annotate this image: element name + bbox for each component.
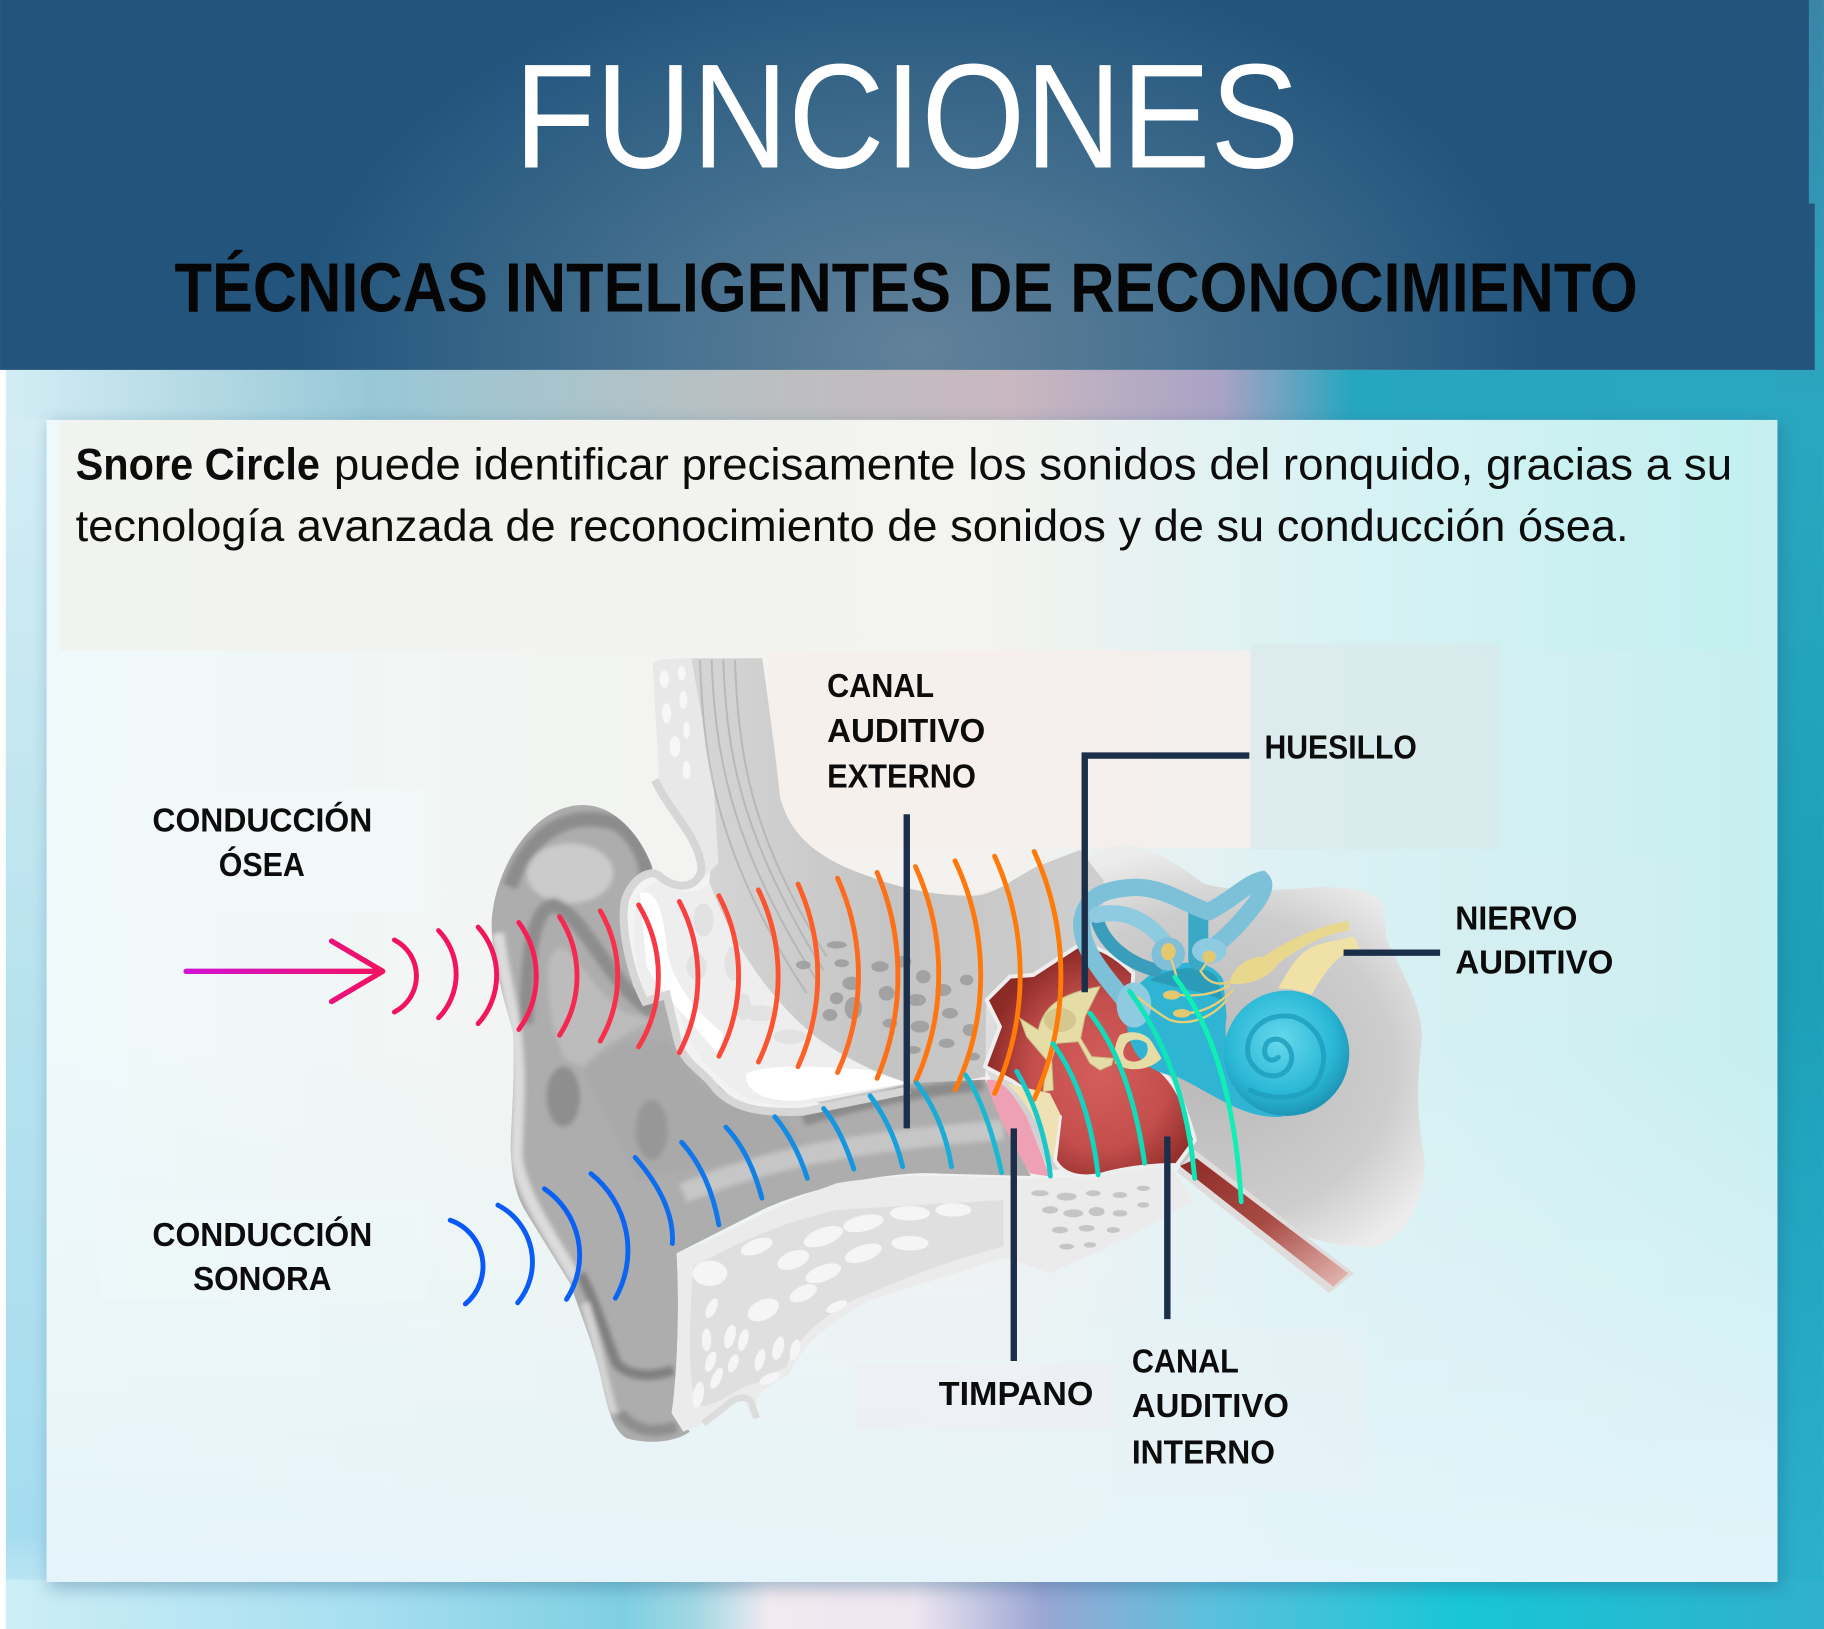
eardrum [987,1080,1050,1177]
label: canal auditivo interno [1132,1344,1289,1471]
label: canal auditivo interno: AUDITIVO [1132,1388,1289,1425]
lower bone [672,1164,1194,1432]
label: canal auditivo externo: CANAL [827,668,934,705]
outer ear bones and pinna [492,658,1194,1442]
label: nervio auditivo: AUDITIVO [1455,945,1613,982]
label: conducción sonora: SONORA [193,1261,332,1298]
cochlea [1224,991,1349,1116]
leader lines [907,756,1440,1361]
label: canal auditivo interno: CANAL [1132,1344,1239,1381]
intro text [76,440,1732,551]
semicircular canals [1082,880,1264,1013]
label: tímpano: TIMPANO [939,1376,1093,1413]
cartilage band and white tissue [634,880,910,1106]
intro text: tecnología avanzada de reconocimiento de sonidos y de su conducción ósea. [76,502,1629,551]
panel: main content card [47,420,1782,1589]
stapes [1115,1032,1162,1069]
label: conducción ósea: CONDUCCIÓN [152,802,372,840]
label: nervio auditivo [1455,900,1613,982]
top sound waves: bone conduction [394,851,1061,1099]
bottom sound waves: air conduction [450,977,1241,1304]
middle and inner ear [985,880,1360,1293]
label: canal auditivo externo: AUDITIVO [827,713,985,750]
subtitle: TÉCNICAS INTELIGENTES DE RECONOCIMIENTO [175,249,1638,327]
auditory nerve [1230,921,1349,984]
header banner [0,0,1815,370]
label: conducción ósea [152,802,372,884]
pinna and canal [492,805,1031,1442]
label: canal auditivo interno: INTERNO [1132,1434,1275,1471]
arrow: bone conduction input [186,941,383,1002]
intro text: puede identificar precisamente los sonidos del ronquido, gracias a su [334,440,1732,489]
intro text: Snore Circle [76,440,320,489]
label: canal auditivo externo: EXTERNO [827,759,976,796]
vestibule [1127,962,1283,1117]
label: conducción sonora: CONDUCCIÓN [152,1216,372,1254]
label: huesillo: HUESILLO [1264,729,1417,766]
tympanic cavity [985,946,1195,1176]
label: canal auditivo externo [827,668,985,796]
label: conducción ósea: ÓSEA [219,846,305,884]
title: FUNCIONES [514,33,1299,200]
ossicles [1020,987,1113,1092]
inner bone region [950,845,1425,1247]
label: conducción sonora [152,1216,372,1298]
label: nervio auditivo: NIERVO [1455,900,1577,937]
auditory tube [1177,1150,1354,1293]
upper bone [687,658,1103,1108]
ear anatomy illustration [492,658,1425,1442]
